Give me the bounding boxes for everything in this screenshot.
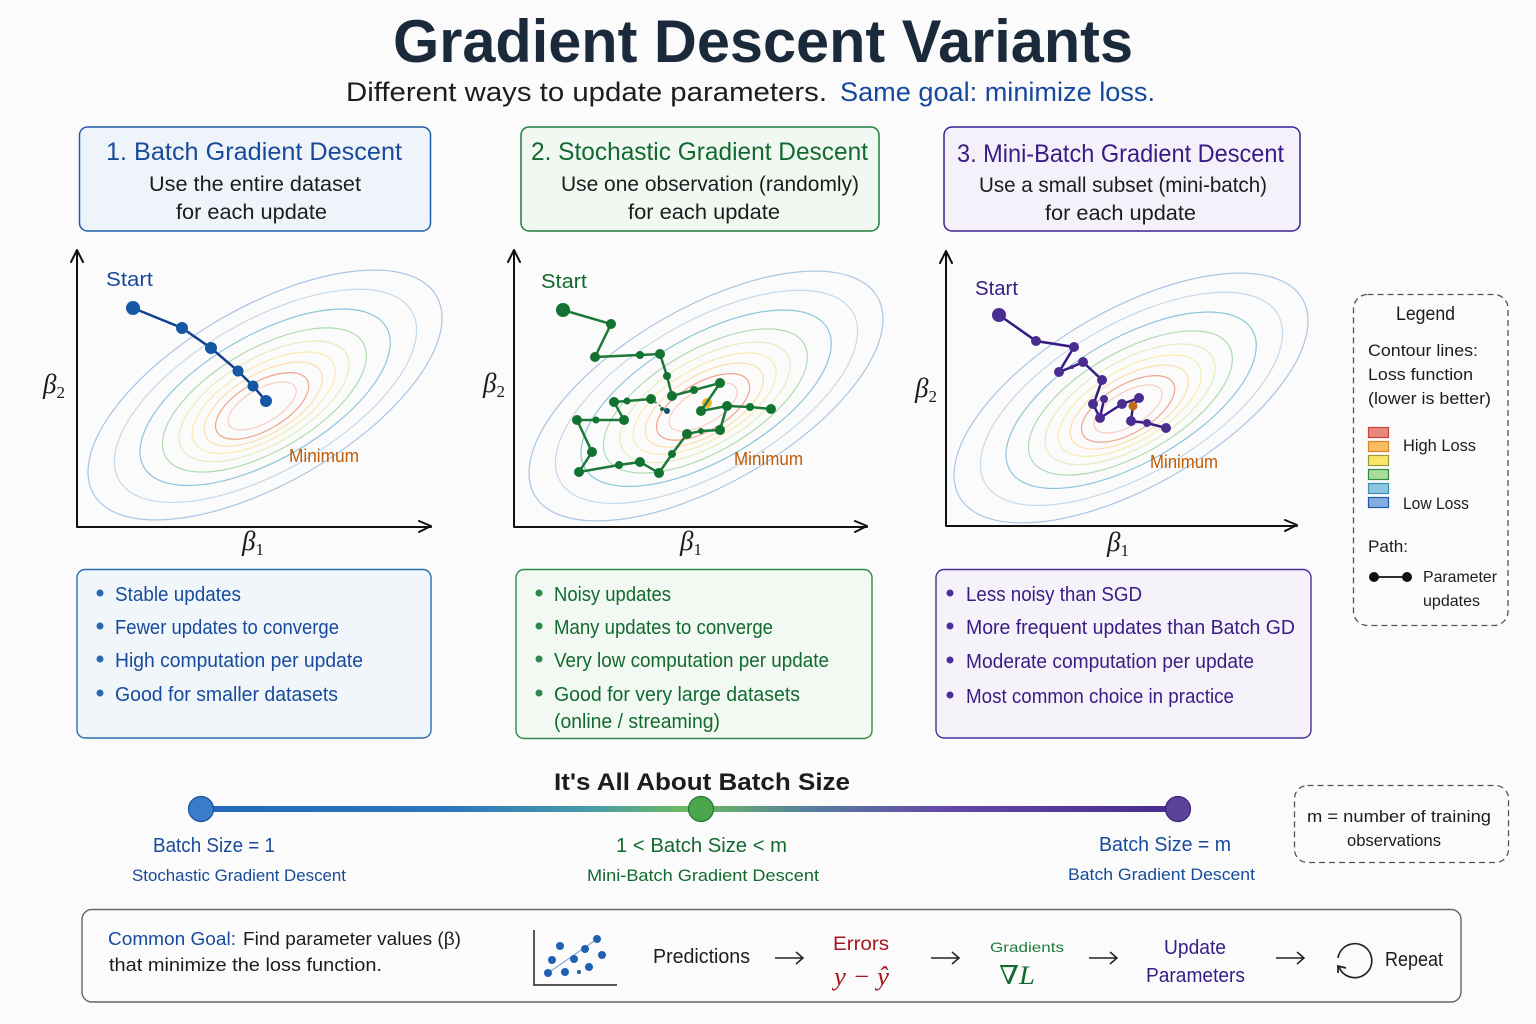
y axis label: 2 bbox=[56, 383, 65, 402]
step: gradients bbox=[990, 939, 1064, 990]
step: update parameters: Update bbox=[1164, 937, 1226, 959]
legend: Loss function bbox=[1368, 365, 1473, 384]
panel: mini-batch gradient descent header: for each update bbox=[1045, 202, 1196, 225]
x axis label: 1 bbox=[693, 540, 702, 559]
subtitle: Different ways to update parameters. bbox=[346, 77, 827, 107]
chart: mini-batch contour plot bbox=[914, 223, 1346, 573]
panel: batch gradient descent header: for each update bbox=[176, 201, 327, 224]
note: m definition: m = number of training bbox=[1307, 807, 1491, 826]
step: errors bbox=[831, 934, 889, 991]
descent path bbox=[126, 301, 272, 407]
panel: batch gradient descent header: Use the entire dataset bbox=[149, 173, 361, 196]
icon: scatter plot bbox=[534, 930, 617, 985]
x axis label: β bbox=[1107, 527, 1120, 557]
scale label: mini-batch bbox=[587, 835, 819, 885]
start label: Start bbox=[541, 271, 587, 293]
panel: mini-batch notes bbox=[936, 570, 1311, 738]
panel: mini-batch notes: Moderate computation per update bbox=[966, 651, 1254, 673]
minimum marker bbox=[1128, 402, 1138, 410]
note: m definition bbox=[1294, 786, 1508, 862]
panel: stochastic gradient descent header bbox=[521, 127, 879, 231]
scale label: batch bbox=[1068, 834, 1255, 884]
scale label: batch: Batch Size = m bbox=[1099, 834, 1231, 856]
x axis label: 1 bbox=[1120, 541, 1129, 560]
x axis label: β bbox=[242, 526, 255, 556]
legend: High Loss bbox=[1403, 436, 1476, 455]
step: update parameters bbox=[1146, 937, 1245, 987]
common goal text: Find parameter values (β) bbox=[243, 929, 461, 949]
panel: common goal workflow bbox=[82, 910, 1461, 1002]
minimum label: Minimum bbox=[734, 449, 803, 469]
panel: stochastic notes: Noisy updates bbox=[554, 584, 671, 606]
legend: Low Loss bbox=[1403, 494, 1469, 513]
minimum label: Minimum bbox=[1150, 452, 1218, 472]
panel: stochastic notes: Very low computation per update bbox=[554, 650, 829, 672]
panel: batch notes: Good for smaller datasets bbox=[115, 684, 338, 706]
panel: batch notes: Stable updates bbox=[115, 584, 241, 606]
panel: stochastic gradient descent header: for each update bbox=[628, 201, 780, 224]
loss contours bbox=[916, 223, 1346, 573]
step: gradients: Gradients bbox=[990, 939, 1064, 955]
minimum marker bbox=[702, 398, 712, 408]
path key bbox=[1369, 572, 1412, 582]
subtitle bbox=[346, 77, 1155, 107]
common goal text bbox=[108, 929, 461, 975]
step: repeat: Repeat bbox=[1385, 949, 1443, 971]
panel: batch notes bbox=[77, 570, 431, 738]
panel: mini-batch notes: Most common choice in practice bbox=[966, 686, 1234, 708]
panel: stochastic notes: Good for very large datasets bbox=[554, 684, 800, 706]
scale label: stochastic: Batch Size = 1 bbox=[153, 835, 275, 857]
panel: stochastic notes bbox=[516, 570, 872, 738]
legend: Path: bbox=[1368, 537, 1408, 556]
legend: Parameter bbox=[1423, 569, 1498, 586]
panel: mini-batch notes: Less noisy than SGD bbox=[966, 584, 1142, 606]
common goal text: Common Goal: bbox=[108, 929, 236, 949]
x axis label: 1 bbox=[255, 540, 264, 559]
legend: updates bbox=[1423, 593, 1480, 610]
chart: batch contour plot bbox=[42, 220, 480, 570]
descent path bbox=[556, 303, 776, 478]
axes bbox=[940, 251, 1297, 531]
axes bbox=[508, 250, 867, 532]
step: gradients: ∇L bbox=[999, 961, 1035, 990]
batch size scale bbox=[188, 796, 1190, 822]
loss colour swatches bbox=[1368, 428, 1388, 508]
title: Gradient Descent Variants bbox=[393, 8, 1133, 75]
y axis label: 2 bbox=[496, 382, 505, 401]
step: errors: y − ŷ bbox=[831, 962, 889, 991]
y axis label: β bbox=[43, 369, 56, 399]
legend bbox=[1354, 294, 1508, 626]
panel: stochastic gradient descent header: 2. Stochastic Gradient Descent bbox=[531, 138, 868, 166]
panel: batch gradient descent header: 1. Batch Gradient Descent bbox=[106, 138, 402, 166]
scale label: mini-batch: 1 < Batch Size < m bbox=[616, 835, 787, 857]
loss contours bbox=[50, 220, 480, 570]
panel: mini-batch gradient descent header: 3. Mini-Batch Gradient Descent bbox=[957, 140, 1284, 168]
scale label: stochastic bbox=[132, 835, 346, 885]
scale label: mini-batch: Mini-Batch Gradient Descent bbox=[587, 866, 819, 885]
start label: Start bbox=[106, 269, 153, 291]
descent path bbox=[992, 308, 1171, 433]
arrow bbox=[931, 952, 959, 964]
x axis label: β bbox=[680, 526, 693, 556]
legend: Legend bbox=[1396, 304, 1455, 325]
minimum label: Minimum bbox=[289, 446, 359, 466]
panel: batch notes: Fewer updates to converge bbox=[115, 617, 339, 639]
step: update parameters: Parameters bbox=[1146, 965, 1245, 987]
panel: mini-batch gradient descent header bbox=[944, 127, 1300, 231]
arrow bbox=[1276, 952, 1304, 964]
subtitle: Same goal: minimize loss. bbox=[840, 77, 1155, 107]
arrow bbox=[775, 952, 803, 964]
scale label: stochastic: Stochastic Gradient Descent bbox=[132, 866, 346, 885]
panel: batch gradient descent header bbox=[80, 127, 430, 231]
axes bbox=[71, 250, 431, 532]
start label: Start bbox=[975, 278, 1018, 300]
step: errors: Errors bbox=[833, 934, 889, 955]
panel: mini-batch gradient descent header: Use a small subset (mini-batch) bbox=[979, 174, 1267, 197]
note: m definition: observations bbox=[1347, 831, 1441, 850]
batch size heading: It's All About Batch Size bbox=[554, 769, 850, 796]
icon: repeat cycle bbox=[1338, 944, 1372, 978]
panel: mini-batch notes: More frequent updates than Batch GD bbox=[966, 617, 1295, 639]
arrow bbox=[1089, 952, 1117, 964]
step: predictions: Predictions bbox=[653, 946, 750, 968]
panel: batch notes: High computation per update bbox=[115, 650, 363, 672]
chart: stochastic contour plot bbox=[482, 221, 921, 571]
y axis label: β bbox=[915, 373, 928, 403]
legend: (lower is better) bbox=[1368, 389, 1491, 408]
common goal text: that minimize the loss function. bbox=[109, 955, 382, 975]
y axis label: β bbox=[483, 368, 496, 398]
panel: stochastic notes: Many updates to converge bbox=[554, 617, 773, 639]
legend: Contour lines: bbox=[1368, 341, 1478, 360]
panel: stochastic notes: (online / streaming) bbox=[554, 711, 720, 733]
y axis label: 2 bbox=[928, 387, 937, 406]
loss contours bbox=[491, 221, 921, 571]
panel: stochastic gradient descent header: Use one observation (randomly) bbox=[561, 173, 859, 196]
scale label: batch: Batch Gradient Descent bbox=[1068, 865, 1255, 884]
